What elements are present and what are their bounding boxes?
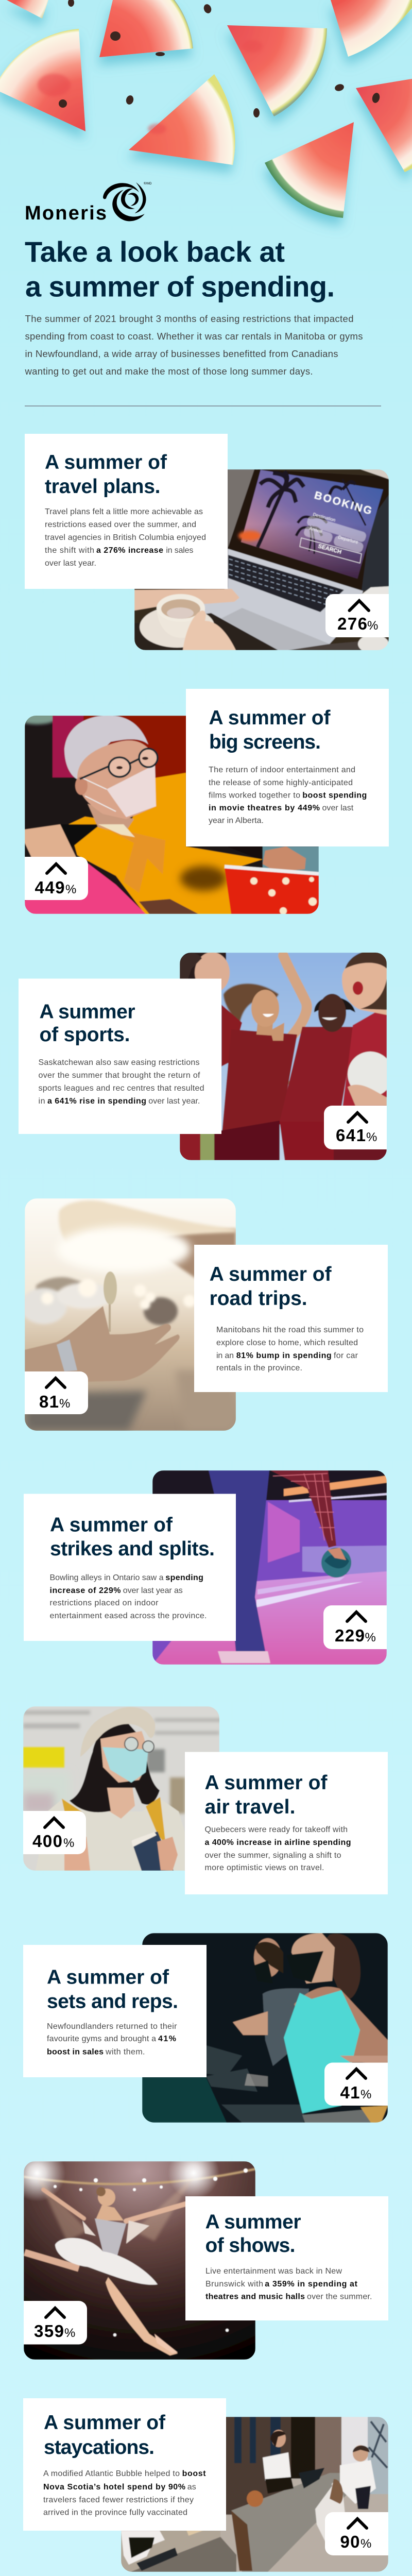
text panel: shows: of shows. [205, 2234, 296, 2257]
text panel: sports [19, 979, 221, 1134]
title [25, 235, 335, 303]
text panel: staycations: travelers faced fewer restrictions if they [43, 2496, 194, 2504]
text panel: staycations: A modified Atlantic Bubble helped to [43, 2469, 180, 2478]
text panel: air travel: over the summer, signaling a shift to [205, 1851, 341, 1860]
hero: watermelon slices [0, 0, 412, 218]
section: shows [9, 2145, 388, 2360]
text panel: road trips: A summer of [210, 1263, 332, 1285]
text panel: sets and reps: boost in sales [47, 2047, 104, 2057]
photo: laptop booking screen: Arrival [308, 526, 323, 534]
badge: 90%: % [360, 2537, 371, 2551]
text panel: travel plans: travel plans. [45, 476, 161, 498]
text panel: strikes and splits: spending [165, 1573, 203, 1582]
text panel: sets and reps: A summer of [47, 1966, 169, 1989]
photo: soccer team celebrating [180, 951, 393, 1160]
text panel: staycations: arrived in the province fully vaccinated [43, 2508, 187, 2517]
text panel: sets and reps: with them. [105, 2047, 145, 2057]
section: sets and reps [23, 1933, 388, 2123]
text panel: road trips [194, 1245, 388, 1392]
text panel: big screens: A summer of [209, 707, 331, 729]
badge: 229%: % [365, 1631, 376, 1645]
badge: 359%: % [64, 2326, 75, 2340]
text panel: big screens: The return of indoor entertainment and [209, 766, 355, 774]
badge: 81% [25, 1371, 88, 1414]
text panel: big screens: films worked together to [209, 791, 300, 800]
text panel: road trips: explore close to home, which resulted [216, 1338, 358, 1347]
text panel: strikes and splits: A summer of [50, 1514, 173, 1536]
badge: 229%: 229 [335, 1626, 365, 1645]
title: a summer of spending. [25, 270, 335, 303]
text panel: strikes and splits [24, 1494, 236, 1641]
badge: 276%: % [367, 619, 378, 633]
text panel: travel plans: over last year. [45, 559, 96, 568]
section: strikes and splits [24, 1470, 387, 1665]
photo: hotel reception [121, 2417, 388, 2572]
text panel: big screens: year in Alberta. [209, 816, 264, 825]
badge: 400% [23, 1811, 86, 1854]
text panel: big screens: big screens. [209, 731, 321, 753]
text panel: strikes and splits: entertainment eased across the province. [49, 1612, 207, 1620]
text panel: travel plans: the shift with [45, 546, 94, 555]
text panel: big screens: the release of some highly-anticipated [209, 778, 353, 787]
text panel: travel plans [25, 434, 228, 589]
text panel: sports: sports leagues and rec centres that resulted [38, 1084, 204, 1093]
title: Take a look back at [25, 235, 285, 268]
section: road trips [21, 1198, 388, 1431]
badge: 449%: % [65, 883, 76, 896]
text panel: strikes and splits: strikes and splits. [50, 1538, 215, 1560]
text panel: big screens [186, 689, 389, 846]
text panel: staycations: as [187, 2483, 196, 2492]
text panel: road trips: Manitobans hit the road this summer to [216, 1326, 364, 1334]
text panel: travel plans: restrictions eased over the summer, and [45, 520, 196, 529]
text panel: big screens: boost spending [302, 791, 367, 800]
intro paragraph: spending from coast to coast. Whether it was car rentals in Manitoba or gyms [25, 331, 363, 342]
text panel: shows: a 359% in spending at [265, 2280, 358, 2289]
photo: laptop booking screen: Destination [312, 512, 336, 523]
text panel: staycations: staycations. [44, 2436, 154, 2459]
text panel: travel plans: A summer of [45, 451, 167, 473]
divider [25, 405, 381, 406]
text panel: road trips: in an [216, 1351, 234, 1360]
text panel: shows: A summer [205, 2211, 301, 2233]
badge: 400%: % [63, 1836, 74, 1850]
badge: 90%: 90 [340, 2532, 359, 2551]
text panel: shows [185, 2196, 388, 2320]
logo: Moneris header [25, 182, 152, 224]
text panel: staycations: boost [182, 2469, 206, 2478]
text panel: sports: A summer [39, 1001, 135, 1023]
section: staycations [23, 2398, 388, 2572]
text panel: travel plans: Travel plans felt a little more achievable as [45, 507, 203, 516]
text panel: sports: Saskatchewan also saw easing restrictions [38, 1058, 200, 1067]
text panel: sets and reps [23, 1945, 207, 2077]
text panel: sets and reps: Newfoundlanders returned to their [47, 2022, 177, 2031]
text panel: big screens: over last [322, 804, 354, 812]
badge: 359%: 359 [34, 2321, 64, 2341]
section: air travel [23, 1706, 388, 1894]
section: big screens [16, 689, 389, 914]
text panel: sets and reps: favourite gyms and brought a [47, 2035, 156, 2043]
text panel: sets and reps: 41% [158, 2035, 176, 2043]
logo: Moneris header: Moneris [25, 202, 107, 224]
text panel: road trips: road trips. [210, 1287, 307, 1310]
logo: Moneris header: ®/MD [144, 182, 152, 185]
badge: 449%: 449 [35, 878, 65, 897]
photo: laptop booking screen: BOOKING [313, 489, 373, 517]
badge: 400%: 400 [32, 1832, 62, 1851]
text panel: sets and reps: sets and reps. [47, 1991, 178, 2012]
text panel: air travel [185, 1752, 388, 1894]
photo: hand tossing car key [21, 1198, 236, 1431]
photo: ballet dancer on stage [9, 2145, 255, 2360]
badge: 449% [25, 857, 88, 900]
text panel: staycations: Nova Scotia’s hotel spend by 90% [43, 2483, 185, 2492]
text panel: sports: a 641% rise in spending [47, 1097, 146, 1106]
text panel: sports: in [38, 1097, 45, 1106]
photo: laptop booking screen: Departure [337, 534, 359, 545]
text panel: sports: over last year. [148, 1097, 200, 1106]
text panel: air travel: a 400% increase in airline spending [205, 1838, 351, 1847]
badge: 90% [325, 2512, 388, 2555]
badge: 41% [324, 2063, 388, 2106]
photo: masked traveller at airport [23, 1706, 221, 1871]
text panel: sports: over the summer that brought the return of [38, 1071, 200, 1080]
badge: 359% [24, 2301, 87, 2344]
text panel: air travel: more optimistic views on travel. [205, 1863, 324, 1872]
badge: 41%: 41 [340, 2083, 359, 2102]
badge: 81%: 81 [39, 1392, 59, 1411]
badge: 229% [323, 1605, 387, 1649]
badge: 276% [325, 594, 389, 637]
intro paragraph [25, 313, 363, 377]
seeds [59, 0, 381, 117]
intro paragraph: wanting to get out and make the most of those long summer days. [25, 366, 313, 377]
badge: 41%: % [360, 2088, 371, 2102]
text panel: big screens: in movie theatres by 449% [209, 804, 320, 812]
text panel: shows: Live entertainment was back in New [205, 2267, 342, 2276]
photo: laptop booking screen: SEARCH [317, 543, 342, 555]
text panel: strikes and splits: over last year as [123, 1586, 183, 1595]
photo: runners on treadmills [142, 1933, 388, 2123]
intro paragraph: The summer of 2021 brought 3 months of easing restrictions that impacted [25, 313, 353, 324]
text panel: road trips: 81% bump in spending [236, 1351, 332, 1360]
badge: 641% [324, 1106, 387, 1149]
text panel: shows: theatres and music halls [205, 2293, 305, 2301]
badge: 276%: 276 [337, 614, 367, 633]
text panel: staycations [23, 2398, 226, 2531]
text panel: road trips: for car [334, 1351, 358, 1360]
text panel: travel plans: travel agencies in British Columbia enjoyed [45, 533, 206, 542]
text panel: shows: Brunswick with [205, 2280, 263, 2289]
section: travel plans [25, 434, 389, 653]
text panel: air travel: Quebecers were ready for takeoff with [205, 1825, 348, 1834]
text panel: strikes and splits: Bowling alleys in Ontario saw a [49, 1573, 164, 1582]
text panel: air travel: air travel. [205, 1796, 296, 1818]
photo: laptop booking screen [134, 469, 389, 653]
text panel: road trips: rentals in the province. [216, 1364, 302, 1372]
intro paragraph: in Newfoundland, a wide array of businesses benefitted from Canadians [25, 348, 338, 359]
text panel: travel plans: in sales [166, 546, 193, 555]
text panel: strikes and splits: restrictions placed on indoor [49, 1599, 159, 1607]
text panel: travel plans: a 276% increase [96, 546, 163, 555]
text panel: air travel: A summer of [205, 1772, 328, 1794]
badge: 81%: % [59, 1397, 70, 1411]
section: sports [19, 951, 393, 1160]
text panel: shows: over the summer. [307, 2293, 372, 2301]
text panel: sports: of sports. [39, 1024, 130, 1046]
text panel: strikes and splits: increase of 229% [49, 1586, 121, 1595]
text panel: staycations: A summer of [44, 2412, 166, 2434]
photo: bowling alley [152, 1470, 387, 1665]
badge: 641%: 641 [336, 1126, 366, 1145]
photo: woman in mask with popcorn [16, 710, 319, 914]
badge: 641%: % [366, 1130, 377, 1144]
